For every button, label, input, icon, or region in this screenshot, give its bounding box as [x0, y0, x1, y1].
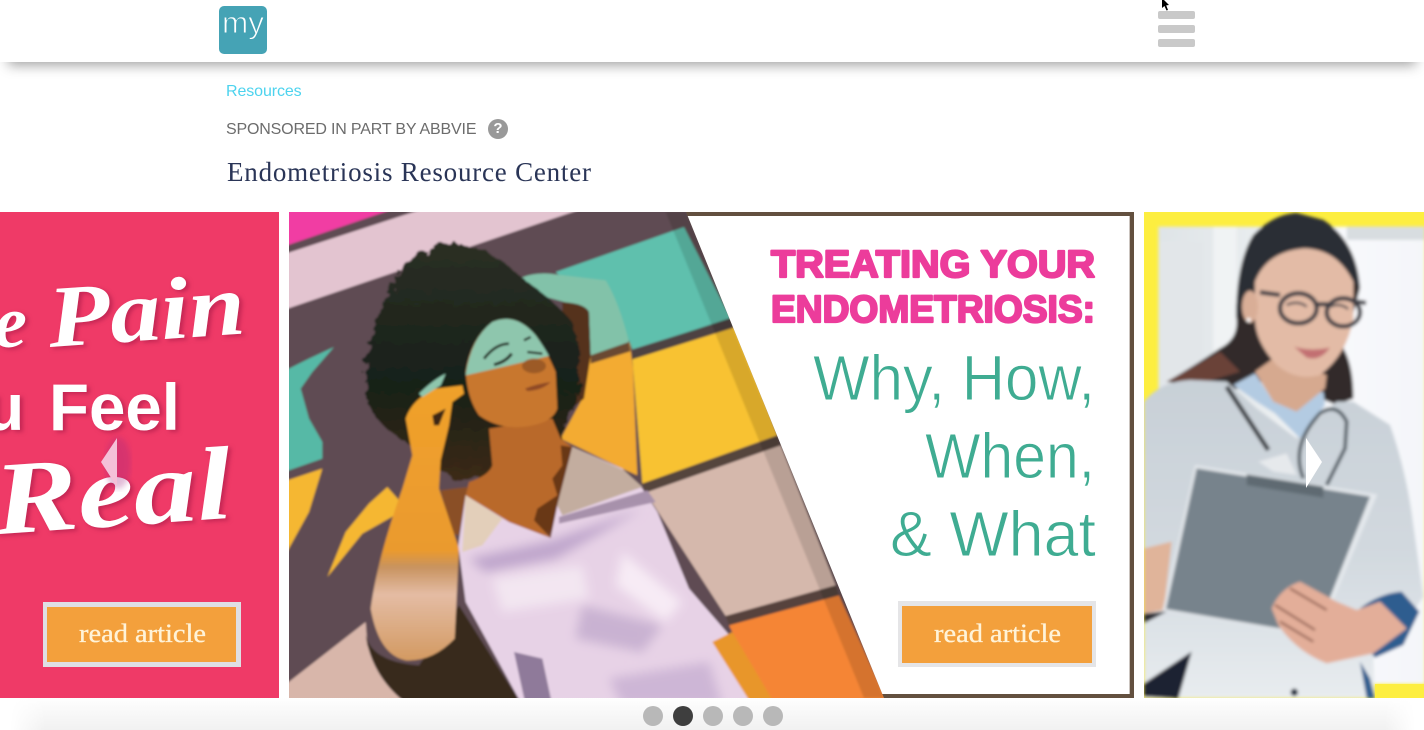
sleeve cuff — [1360, 592, 1419, 658]
dress folds — [469, 509, 722, 705]
text block: headline — [771, 244, 1096, 667]
bottom yellow frame edge — [1375, 684, 1424, 698]
headline: the pain you feel is real — [0, 256, 248, 557]
raised arm — [561, 343, 637, 475]
sponsor text: SPONSORED IN PART BY ABBVIE — [226, 121, 476, 138]
photo: doctor with clipboard — [1144, 213, 1424, 698]
heading: treating your endometriosis: TREATING YOUR — [771, 244, 1095, 286]
button: read article: read article — [934, 619, 1061, 648]
logo: my — [219, 6, 267, 54]
neck and chest — [466, 419, 572, 538]
button: read article — [43, 602, 241, 667]
face — [1255, 248, 1353, 377]
button: read article — [898, 601, 1096, 667]
panel: left carousel card — [0, 212, 279, 698]
logo: my: my — [222, 6, 265, 40]
icon: question mark: ? — [493, 120, 503, 137]
subheading: why, how, when, and what: & What — [890, 498, 1096, 570]
heading: treating your endometriosis: ENDOMETRIOSIS: — [771, 289, 1095, 331]
mouth — [1294, 347, 1330, 359]
headline: the pain you feel is real: Feel — [49, 370, 180, 444]
blue shirt collar — [1233, 373, 1325, 438]
breadcrumb: Resources: Resources — [226, 83, 302, 100]
coat — [1144, 380, 1423, 698]
footer shadow — [31, 716, 1397, 730]
white text panel with brown frame — [686, 212, 1134, 698]
page title: Endometriosis Resource Center — [227, 157, 591, 187]
shoulder — [441, 487, 467, 535]
carousel pagination dots — [643, 706, 783, 726]
clipboard — [1163, 465, 1377, 631]
sponsor line — [226, 119, 508, 139]
photo: woman lying in coloured shadows — [282, 205, 1149, 705]
dress — [458, 447, 759, 705]
hair — [365, 244, 581, 482]
icon: hamburger menu — [1158, 11, 1195, 47]
subheading: why, how, when, and what: Why, How, — [813, 342, 1095, 414]
neck — [1255, 358, 1327, 412]
panel: right carousel card — [1144, 212, 1424, 698]
header shadow — [8, 40, 1416, 62]
glasses — [1260, 292, 1366, 326]
yellow frame — [1144, 212, 1424, 698]
hand and forearm — [1272, 582, 1407, 663]
button: read article: read article — [79, 619, 206, 648]
header bar — [0, 0, 1424, 62]
arm left skin — [1144, 542, 1172, 613]
icon: left carousel arrow — [101, 436, 132, 492]
dark coat bits — [1144, 652, 1192, 698]
face — [466, 319, 557, 427]
subheading: why, how, when, and what — [813, 342, 1096, 570]
heading: treating your endometriosis — [771, 244, 1095, 331]
icon: mouse cursor — [1162, 0, 1169, 10]
icon: right carousel arrow — [1306, 438, 1322, 488]
icon: question mark — [488, 119, 508, 139]
left arm and hand — [371, 385, 464, 660]
stethoscope — [1227, 387, 1268, 450]
headline: the pain you feel is real: Pain — [43, 256, 248, 367]
hair back — [1167, 213, 1360, 405]
panel: center carousel card — [289, 212, 1134, 698]
subheading: why, how, when, and what: When, — [925, 420, 1095, 492]
